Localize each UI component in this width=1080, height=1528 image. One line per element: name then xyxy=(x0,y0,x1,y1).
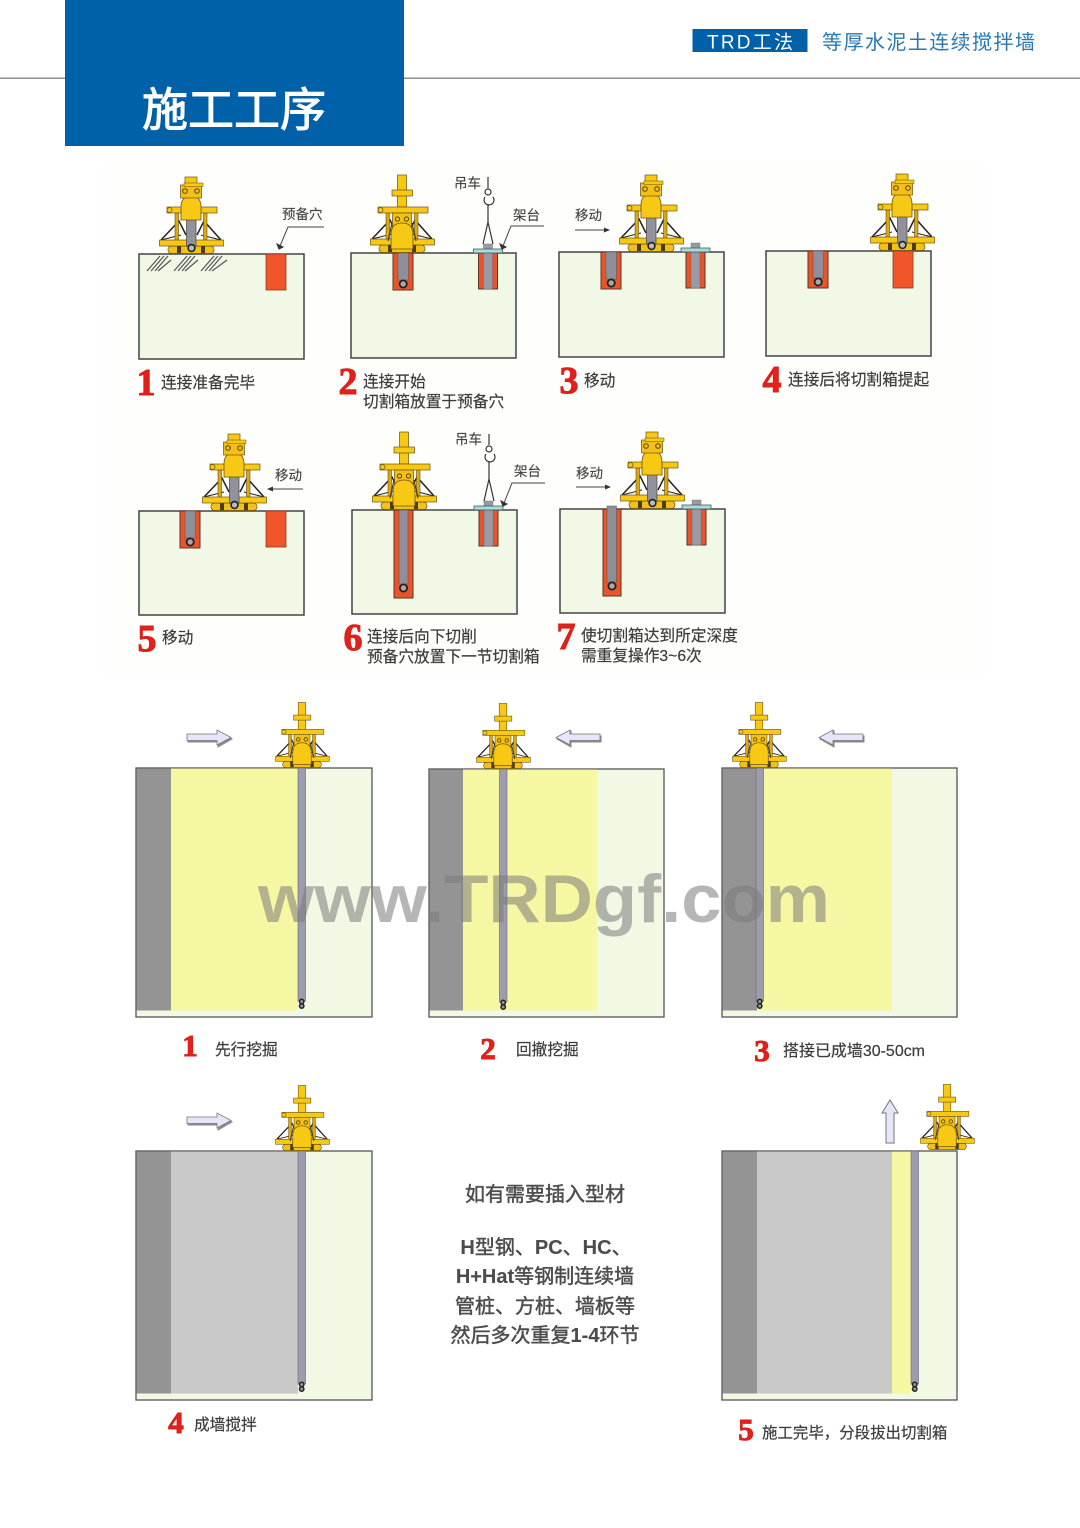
panel: upper step sequence background xyxy=(102,165,986,675)
step 2: connection starts: 连接开始 xyxy=(363,373,426,391)
stage 1: initial excavation: 1 xyxy=(182,1028,198,1063)
step 6: cut downward: 吊车 xyxy=(455,431,482,447)
step 2: connection starts: 架台 xyxy=(513,208,540,223)
note: inserting steel sections: 然后多次重复1-4环节 xyxy=(451,1324,639,1347)
note: inserting steel sections: H+Hat等钢制连续墙 xyxy=(456,1265,634,1288)
step 3: move xyxy=(559,175,724,402)
step 6: cut downward: 连接后向下切削 xyxy=(367,628,477,646)
step 3: move: 3 xyxy=(560,360,578,402)
step 5: move: 5 xyxy=(138,618,156,660)
stage 1: initial excavation: 先行挖掘 xyxy=(215,1041,278,1059)
step 7: reach design depth: 移动 xyxy=(576,466,603,481)
stage 5: completion, extract cutting box xyxy=(722,1084,974,1447)
stage 3: overlap with existing wall: 搭接已成墙30-50cm xyxy=(783,1042,925,1060)
step 2: connection starts: 切割箱放置于预备穴 xyxy=(363,393,504,411)
stage 1: initial excavation xyxy=(136,702,372,1063)
step 5: move xyxy=(138,434,304,660)
watermark: www.TRDgf.com: www.TRDgf.com xyxy=(257,861,830,937)
step 1: preparation complete: 1 xyxy=(136,362,156,404)
header tag: TRD工法: TRD工法 xyxy=(707,32,793,54)
stage 4: wall mixing: 成墙搅拌 xyxy=(194,1416,257,1434)
step 5: move: 移动 xyxy=(162,629,193,647)
step 2: connection starts xyxy=(338,175,544,411)
step 4: lift after connecting xyxy=(762,174,934,401)
stage 4: wall mixing xyxy=(136,1085,372,1440)
step 4: lift after connecting: 连接后将切割箱提起 xyxy=(788,371,929,389)
step 6: cut downward: 预备穴放置下一节切割箱 xyxy=(367,648,540,666)
step 6: cut downward: 6 xyxy=(344,617,362,659)
note: inserting steel sections: 管桩、方桩、墙板等 xyxy=(455,1295,635,1318)
step 3: move: 移动 xyxy=(584,372,615,390)
stage 3: overlap with existing wall xyxy=(722,702,957,1068)
step 6: cut downward xyxy=(344,431,545,666)
step 7: reach design depth xyxy=(556,432,738,665)
note: inserting steel sections xyxy=(451,1183,639,1347)
header tag: TRD工法 xyxy=(692,29,808,54)
note: inserting steel sections: 如有需要插入型材 xyxy=(465,1183,625,1206)
step 2: connection starts: 2 xyxy=(338,361,358,403)
step 7: reach design depth: 需重复操作3~6次 xyxy=(581,647,702,665)
step 7: reach design depth: 使切割箱达到所定深度 xyxy=(581,627,738,645)
stage 4: wall mixing: 4 xyxy=(168,1405,184,1440)
note: inserting steel sections: H型钢、PC、HC、 xyxy=(460,1236,632,1259)
header subtitle: 等厚水泥土连续搅拌墙 xyxy=(822,31,1035,54)
stage 5: completion, extract cutting box: 施工完毕，分段拔出切割箱 xyxy=(762,1424,947,1442)
title block: 施工工序: 施工工序 xyxy=(142,84,326,136)
header rule xyxy=(0,78,1080,79)
step 2: connection starts: 吊车 xyxy=(454,175,481,191)
step 7: reach design depth: 7 xyxy=(556,616,576,658)
step 5: move: 移动 xyxy=(275,468,302,483)
stage 2: return excavation xyxy=(429,703,664,1066)
step 1: preparation complete: 连接准备完毕 xyxy=(161,374,255,392)
step 6: cut downward: 架台 xyxy=(514,464,541,479)
title block: 施工工序 xyxy=(65,0,404,146)
stage 2: return excavation: 2 xyxy=(480,1031,496,1066)
stage 2: return excavation: 回撤挖掘 xyxy=(516,1041,579,1059)
step 1: preparation complete xyxy=(136,177,324,404)
stage 3: overlap with existing wall: 3 xyxy=(754,1033,770,1068)
stage 5: completion, extract cutting box: 5 xyxy=(738,1412,754,1447)
step 1: preparation complete: 预备穴 xyxy=(282,206,322,222)
step 4: lift after connecting: 4 xyxy=(762,359,782,401)
step 3: move: 移动 xyxy=(575,208,602,223)
